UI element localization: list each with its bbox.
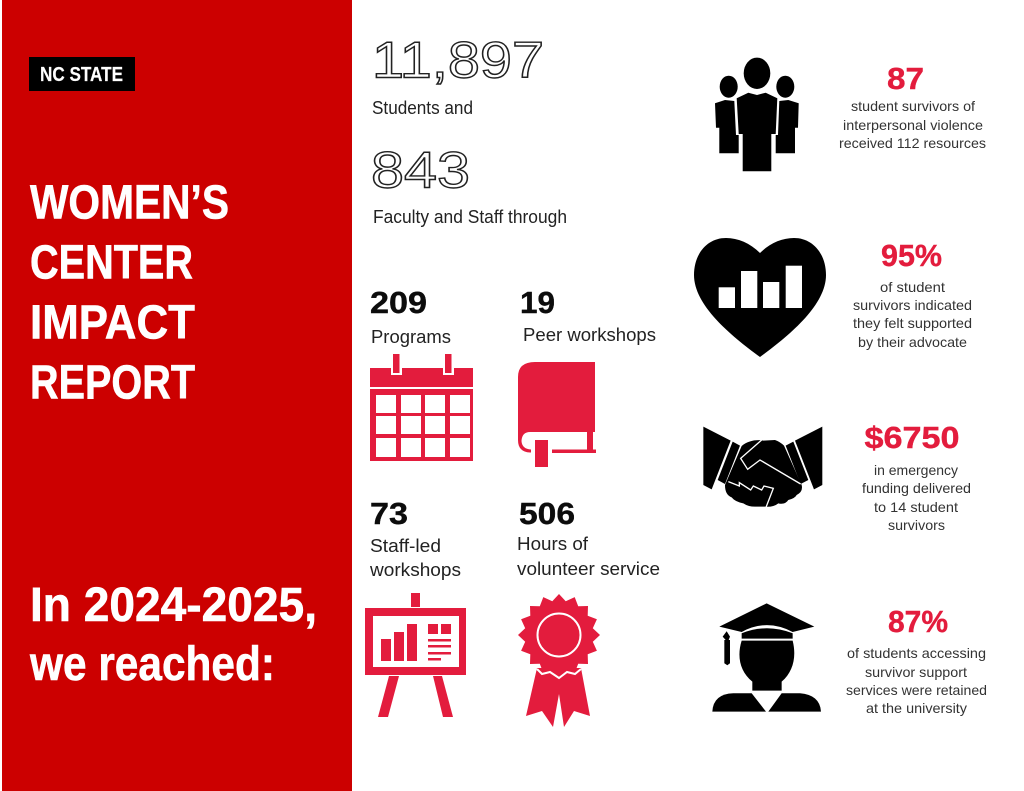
stat: 73 staff-led workshops: workshops [369,560,461,580]
stat: 73 staff-led workshops: Staff-led [370,536,441,556]
stat: 87 student survivors: received 112 resources [839,135,986,151]
icon: heart with bars [694,238,826,357]
stat: 87 student survivors: student survivors of [851,98,975,114]
title: Women's Center Impact Report: CENTER [30,236,193,290]
stat: 87 student survivors [839,62,986,151]
icon: presentation easel [365,593,466,717]
stat: 209 programs: Programs [371,327,451,347]
stat: 95% felt supported: of student [880,279,945,295]
stat: $6750 emergency funding: funding delivered [862,480,971,496]
icon: handshake [703,427,822,507]
stat: 87% retained: 87% [888,605,948,639]
stat: 506 volunteer hours: Hours of [517,534,589,554]
stat: 11,897 students: Students and [372,98,473,118]
title: Women's Center Impact Report [30,176,229,410]
stat: $6750 emergency funding: $6750 [864,421,960,455]
stat: 87% retained: survivor support [865,664,967,680]
stat: 19 peer workshops: Peer workshops [523,325,656,345]
stat: 95% felt supported: by their advocate [858,334,967,350]
stat: 843 faculty and staff: Faculty and Staff through [373,207,567,227]
stat: 95% felt supported: 95% [881,239,942,273]
stat: 843 faculty and staff [371,142,567,227]
icon: graduate with mortarboard [712,603,821,712]
logo: NC State [29,57,135,91]
icon: award rosette [518,594,600,727]
stat: 506 volunteer hours [517,497,660,579]
stat: 73 staff-led workshops: 73 [370,497,408,531]
stat: 19 peer workshops: 19 [520,286,555,320]
stat: $6750 emergency funding: to 14 student [874,499,958,515]
stat: 87% retained: at the university [866,700,967,716]
subtitle: In 2024-2025, we reached: we reached: [29,638,275,691]
stat: $6750 emergency funding: in emergency [874,462,958,478]
stat: 209 programs: 209 [370,286,427,320]
stat: 87% retained: services were retained [846,682,987,698]
stat: 73 staff-led workshops [369,497,461,580]
logo: NC State: NC STATE [40,64,123,86]
stat: 209 programs [370,286,451,347]
subtitle: In 2024-2025, we reached [29,579,317,691]
stat: 95% felt supported: survivors indicated [853,297,972,313]
stat: 87 student survivors: interpersonal violence [843,117,983,133]
stat: 11,897 students [372,32,544,118]
stat: $6750 emergency funding [862,421,971,533]
icon: book [518,362,596,467]
stat: 843 faculty and staff: 843 [371,142,470,198]
stat: $6750 emergency funding: survivors [888,517,945,533]
stat: 95% felt supported [853,239,972,350]
stat: 506 volunteer hours: volunteer service [517,559,660,579]
stat: 87% retained [846,605,987,716]
subtitle: In 2024-2025, we reached: In 2024-2025, [30,579,317,632]
title: Women's Center Impact Report: REPORT [30,356,195,410]
stat: 19 peer workshops [520,286,656,345]
icon: calendar [370,354,473,461]
stat: 87 student survivors: 87 [887,62,924,96]
stat: 11,897 students: 11,897 [372,32,544,88]
stat: 506 volunteer hours: 506 [519,497,575,531]
stat: 95% felt supported: they felt supported [853,315,972,331]
title: Women's Center Impact Report: WOMEN’S [30,176,229,230]
icon: group of people [715,58,799,171]
panel: red title sidebar [2,0,352,791]
stat: 87% retained: of students accessing [847,645,986,661]
title: Women's Center Impact Report: IMPACT [30,296,195,350]
